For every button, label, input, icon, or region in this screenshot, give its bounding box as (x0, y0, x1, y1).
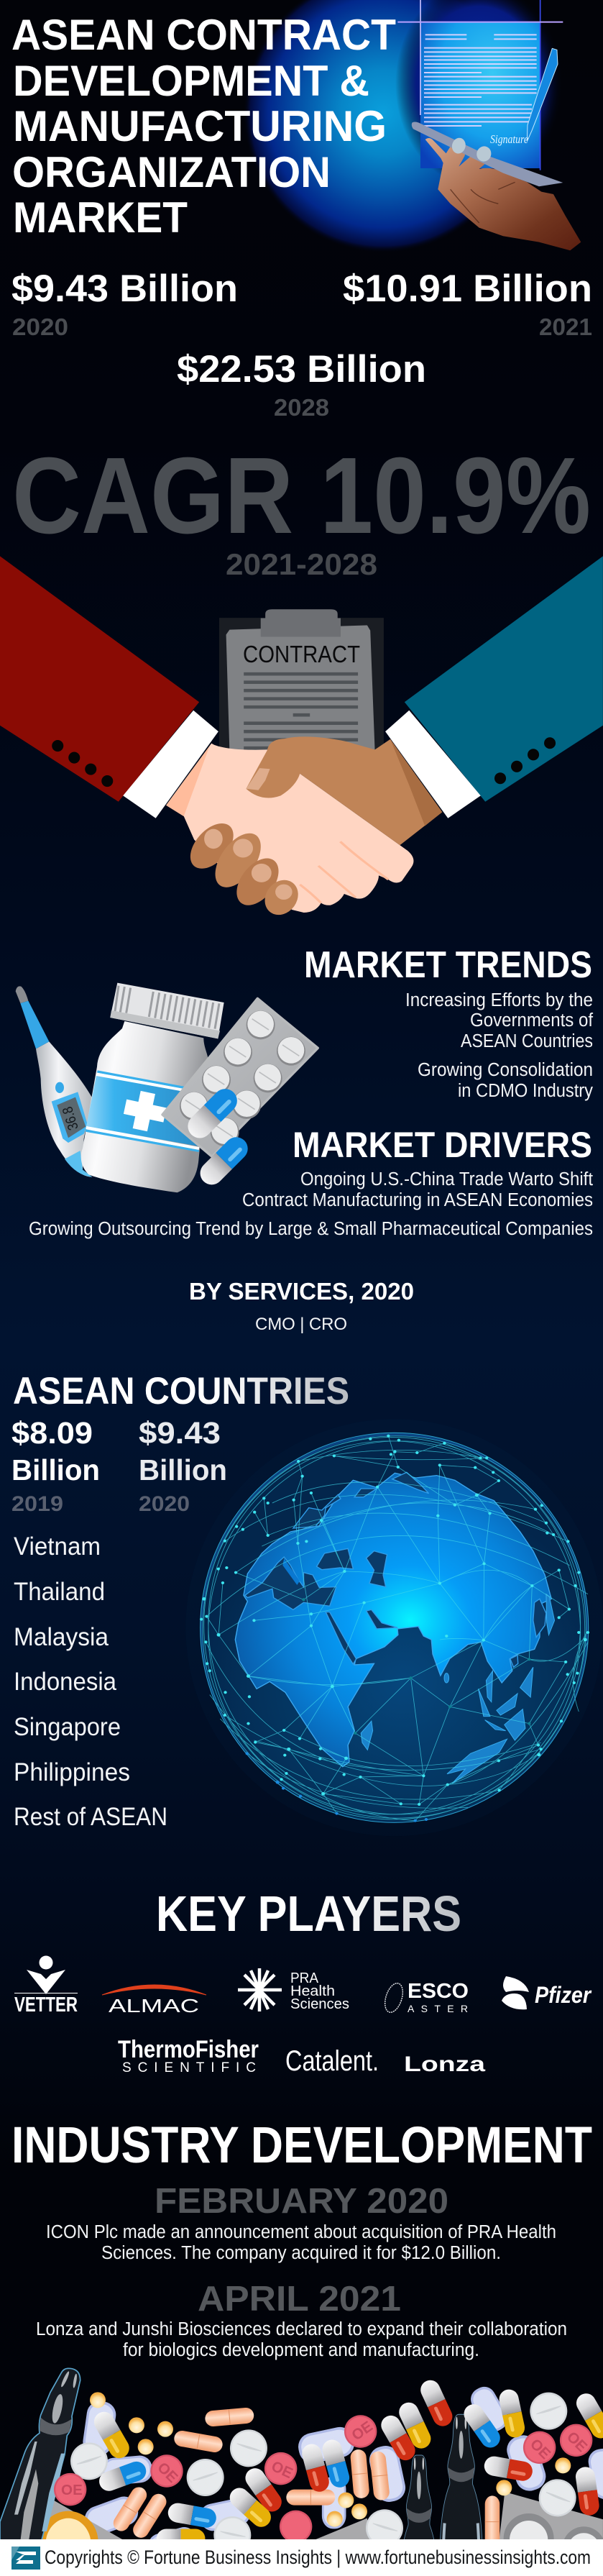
key players heading: KEY PLAYERS (156, 1886, 461, 1942)
soft gels (327, 2457, 571, 2527)
finger creases (451, 182, 515, 223)
ASEAN countries (11, 1370, 349, 1831)
April date: APRIL 2021 (198, 2280, 401, 2319)
2020 value: 2020 (139, 1492, 190, 1516)
2019 value (11, 1416, 100, 1516)
pills illustration, left half (0, 2368, 312, 2573)
trends list: Increasing Efforts by the (405, 990, 593, 1010)
country list: Vietnam (14, 1533, 101, 1561)
logo: Thermo Fisher Scientific: SCIENTIFIC (122, 2060, 256, 2075)
trends list: ASEAN Countries (461, 1031, 593, 1051)
logo: PRA Health Sciences: Health (290, 1983, 335, 1999)
2020 value: Billion (139, 1453, 227, 1486)
logo: Thermo Fisher Scientific: ThermoFisher (118, 2036, 259, 2063)
by services: BY SERVICES, 2020 (189, 1279, 414, 1305)
pink tablets: OE (61, 2482, 83, 2498)
logo: Vetter: VETTER (14, 1993, 78, 2017)
inland seas (245, 1472, 546, 1667)
CAGR period: 2021-2028 (226, 547, 377, 581)
logo: PRA Health Sciences: PRA (290, 1970, 319, 1986)
by services (189, 1279, 414, 1334)
footer logo (11, 2547, 40, 2570)
pink tablets: OE (527, 2436, 553, 2462)
title: DEVELOPMENT & (13, 57, 369, 105)
logo: Esco Aster (382, 1980, 469, 2014)
2020 value: $9.43 Billion (11, 268, 238, 310)
blister with golden tablet (31, 2499, 129, 2573)
logo: Almac: ALMAC (109, 1995, 199, 2017)
bottle body (81, 1021, 208, 1192)
medicine illustration (16, 983, 318, 1192)
dark hand shadow (390, 739, 442, 826)
bottle label (86, 1070, 199, 1152)
blister packs (306, 2492, 603, 2570)
country list: Philippines (14, 1758, 130, 1786)
bottle cap (110, 983, 224, 1038)
trends list: Growing Consolidation (418, 1060, 593, 1080)
pink tablets (344, 2415, 592, 2464)
February date: FEBRUARY 2020 (155, 2182, 448, 2221)
logo: Vetter (14, 1956, 78, 2017)
globe illustration (182, 1419, 603, 1837)
pills illustration, right half (286, 2377, 603, 2576)
April description: Lonza and Junshi Biosciences declared to expand their collaboration (36, 2319, 567, 2339)
handshake illustration (0, 556, 603, 917)
pink tablets (54, 2452, 312, 2543)
market size statistics (11, 268, 592, 421)
white tablets (359, 2393, 584, 2554)
title: MANUFACTURING (13, 102, 387, 150)
ampoule (0, 2368, 80, 2544)
pink tablets: OE (349, 2418, 376, 2444)
halo (185, 1419, 603, 1836)
capsules (183, 1084, 252, 1189)
country list (14, 1533, 167, 1831)
logo: Esco Aster: ESCO (408, 1980, 469, 2003)
2021 value: $10.91 Billion (343, 268, 592, 310)
logo: Esco Aster: ASTER (408, 2003, 468, 2014)
February description: ICON Plc made an announcement about acquisition of PRA Health (46, 2222, 556, 2242)
2028 value: $22.53 Billion (177, 348, 426, 390)
lavender tablets (295, 2383, 603, 2558)
title: ASEAN CONTRACT (11, 11, 396, 59)
2028 year: 2028 (274, 394, 329, 421)
islands and australia (361, 1594, 555, 1783)
country list: Rest of ASEAN (14, 1803, 167, 1831)
drivers list: Ongoing U.S.-China Trade Warto Shift (300, 1169, 593, 1189)
peach capsules (286, 2449, 500, 2548)
April description: for biologics development and manufacturing. (123, 2340, 479, 2360)
hero illustration: hand holding tablet with glowing contract (242, 0, 581, 253)
dark ampoules (399, 2414, 482, 2576)
pink tablets: OE (154, 2459, 181, 2486)
fingernails (450, 137, 493, 163)
logo: Catalent: Catalent. (285, 2045, 379, 2077)
logo: PRA Health Sciences (238, 1968, 349, 2012)
coloured capsules (91, 2408, 285, 2549)
title (11, 11, 396, 242)
2019 value: $8.09 (11, 1416, 93, 1451)
pink tablets: OE (269, 2458, 295, 2482)
February description: Sciences. The company acquired it for $12.0 Billion. (101, 2243, 501, 2263)
darker south nodes (302, 1598, 531, 1735)
drivers list (29, 1169, 593, 1239)
trends list: in CDMO Industry (458, 1081, 593, 1101)
logo: Thermo Fisher Scientific (118, 2036, 259, 2075)
coloured capsules (300, 2388, 603, 2516)
country list: Indonesia (14, 1668, 116, 1696)
logo: Lonza: Lonza (404, 2052, 485, 2076)
2020 year: 2020 (12, 314, 68, 340)
network nodes (200, 1435, 589, 1822)
drivers list: Contract Manufacturing in ASEAN Economies (242, 1190, 593, 1210)
peach capsules (111, 2407, 254, 2541)
logo: Pfizer (502, 1976, 592, 2009)
market trends (304, 944, 594, 1101)
wrist shadow (166, 744, 211, 816)
tablet (412, 122, 563, 186)
logos (14, 1956, 592, 2077)
logo: Pfizer: Pfizer (535, 1982, 592, 2008)
development: February 2020 (46, 2182, 556, 2263)
April description (36, 2319, 567, 2360)
ASEAN countries heading: ASEAN COUNTRIES (13, 1370, 349, 1412)
light hand (166, 744, 413, 913)
document glow (395, 0, 563, 187)
market drivers (29, 1125, 593, 1239)
teal sleeve (405, 556, 603, 802)
pen (527, 48, 558, 142)
country list: Singapore (14, 1713, 121, 1741)
2020 value: $9.43 (139, 1416, 221, 1451)
peninsula (282, 1558, 300, 1585)
dark hand (246, 736, 442, 845)
development: April 2021 (36, 2280, 567, 2360)
thermometer reading text: 36.8 (60, 1105, 82, 1132)
continents (235, 1473, 551, 1767)
footer bar (0, 2539, 603, 2576)
thermometer (16, 986, 92, 1177)
glowing document (397, 0, 563, 170)
soft gels (90, 2392, 173, 2454)
clipboard (219, 609, 384, 752)
2021 year: 2021 (539, 314, 592, 340)
left cuff (123, 711, 218, 818)
right cuff (385, 711, 481, 818)
services segments: CMO | CRO (255, 1315, 347, 1334)
sleeve buttons (52, 737, 556, 787)
ocean (203, 1435, 586, 1822)
2019 value: 2019 (11, 1492, 63, 1516)
February description (46, 2222, 556, 2263)
country list: Malaysia (14, 1623, 109, 1651)
dark fingers (182, 818, 303, 917)
hand (425, 138, 581, 250)
pink tablets: OE (563, 2429, 590, 2455)
contract label: CONTRACT (243, 641, 360, 667)
2019 value: Billion (11, 1453, 100, 1486)
lavender tablets (81, 2400, 253, 2562)
upper capsules (377, 2377, 456, 2464)
title: ORGANIZATION (12, 148, 331, 196)
white tablets (70, 2422, 275, 2560)
signature: Signature (490, 132, 528, 146)
red sleeve (0, 556, 199, 802)
blister pack (162, 998, 318, 1156)
trends list: Governments of (470, 1010, 594, 1031)
dark thumb nail (246, 768, 270, 790)
2020 value (139, 1416, 227, 1516)
finger creases (300, 841, 388, 903)
trends list (405, 990, 594, 1101)
title: MARKET (13, 193, 188, 242)
logo: PRA Health Sciences: Sciences (290, 1996, 349, 2012)
network arcs (182, 1419, 603, 1837)
globe rim (200, 1433, 589, 1823)
logo: Almac (102, 1985, 206, 2017)
country list: Thailand (14, 1578, 105, 1606)
